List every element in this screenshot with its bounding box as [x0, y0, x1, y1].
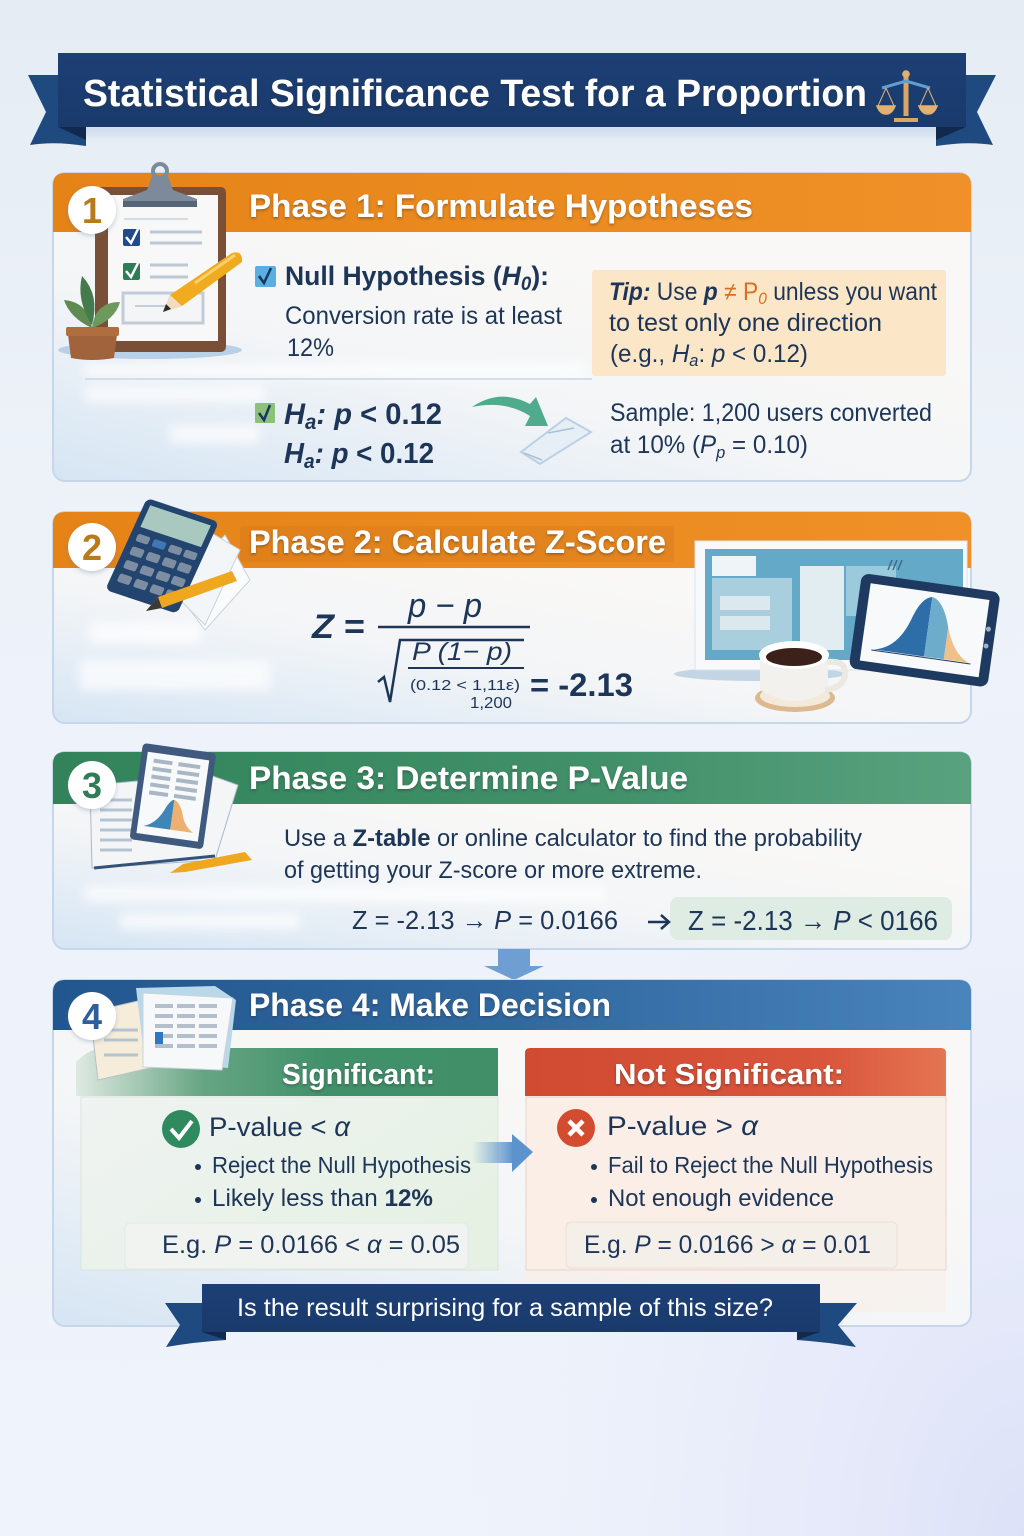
- icon: balance scales: [877, 71, 937, 120]
- example box: [566, 1222, 897, 1268]
- z to p results: [352, 897, 952, 940]
- instruction text: Use a Z-table or online calculator to find the probability: [284, 825, 862, 852]
- alternative hypotheses: a: [304, 451, 315, 473]
- example box: [125, 1223, 468, 1269]
- heading: significant: Significant:: [282, 1059, 435, 1091]
- z-score formula: p − p: [407, 587, 482, 625]
- icon: monitor, tablet and coffee: [674, 541, 1001, 712]
- icon: check badge: [162, 1110, 200, 1148]
- icon: stacked documents: [90, 986, 236, 1080]
- example box: E.g. P = 0.0166 > α = 0.01: [584, 1231, 871, 1259]
- alternative hypotheses: [255, 398, 442, 473]
- null hypothesis block: 12%: [287, 334, 334, 362]
- heading: Phase 1: Formulate Hypotheses: [249, 188, 753, 224]
- z-score formula: = -2.13: [530, 667, 633, 703]
- null hypothesis block: Conversion rate is at least: [285, 302, 562, 330]
- z to p results: Z = -2.13 → P < 0166: [688, 905, 938, 936]
- tip callout: (e.g., H: [610, 340, 690, 368]
- icon: cross badge: [557, 1109, 595, 1147]
- icon: clipboard with plant and pencil: [58, 164, 242, 360]
- z-score formula: (0.12 < 1,11ε): [410, 677, 520, 694]
- heading: Phase 3: Determine P-Value: [249, 760, 688, 796]
- panel: significant: [76, 1048, 498, 1270]
- null hypothesis block: ):: [531, 261, 549, 291]
- z to p results: Z = -2.13 → P = 0.0166: [352, 905, 618, 935]
- icon: folded paper: [521, 418, 591, 464]
- example box: E.g. P = 0.0166 < α = 0.05: [162, 1231, 460, 1259]
- number badge 1: 1: [82, 190, 102, 231]
- heading: [240, 526, 674, 562]
- tip callout: a: [689, 351, 698, 370]
- bottom banner: [165, 1284, 857, 1347]
- number badge 3: 3: [82, 765, 102, 806]
- criterion: P-value < α: [209, 1112, 352, 1142]
- tip callout: [592, 270, 946, 376]
- number badge 4: 4: [82, 996, 102, 1037]
- z-score formula: [311, 587, 633, 712]
- z-score formula: Z =: [311, 608, 365, 646]
- sample text: at 10% (P: [610, 431, 717, 459]
- panel: phase 4: [53, 980, 971, 1326]
- tip callout: 0: [758, 289, 767, 308]
- tip callout: to test only one direction: [609, 309, 882, 337]
- bullets: Reject the Null Hypothesis: [212, 1152, 471, 1178]
- null hypothesis block: [255, 261, 562, 362]
- heading: not significant: Not Significant:: [614, 1059, 844, 1091]
- panel: phase 1: [53, 164, 971, 481]
- alternative hypotheses: < 0.12: [360, 398, 445, 431]
- sample text: = 0.10): [725, 431, 808, 459]
- sample text: p: [715, 443, 725, 462]
- criterion: P-value > α: [607, 1111, 760, 1141]
- icon: tablet and papers: [90, 743, 252, 873]
- bullets: [591, 1152, 933, 1212]
- z-score formula: P (1− p): [412, 638, 512, 666]
- arrow: phase 3 to phase 4: [484, 949, 544, 980]
- number badge 2: 2: [82, 527, 102, 568]
- panel: phase 2: [53, 498, 1001, 723]
- number badge 1: [68, 186, 116, 234]
- title text: Statistical Significance Test for a Proportion: [83, 73, 867, 115]
- tip callout: unless you want: [767, 278, 937, 306]
- heading: Phase 4: Make Decision: [249, 987, 611, 1023]
- number badge 2: [68, 523, 116, 571]
- panel: not significant: [525, 1048, 946, 1312]
- z-score formula: 1,200: [470, 695, 512, 712]
- alternative hypotheses: < 0.12: [357, 438, 438, 470]
- arrow: curved teal: [472, 397, 548, 426]
- instruction text: of getting your Z-score or more extreme.: [284, 857, 702, 884]
- alternative hypotheses: H: [284, 438, 305, 470]
- number badge 3: [68, 761, 116, 809]
- arrow: significant to not significant: [472, 1134, 533, 1172]
- instruction text: [284, 825, 862, 884]
- null hypothesis block: 0: [521, 274, 532, 295]
- wisps: [85, 364, 585, 443]
- icon: calculator with pencil and papers: [105, 498, 250, 630]
- tip callout: p < 0.12): [712, 340, 811, 368]
- alternative hypotheses: H: [284, 398, 306, 431]
- bullets: [195, 1152, 471, 1212]
- alternative hypotheses: a: [305, 411, 317, 434]
- sample text: Sample: 1,200 users converted: [610, 399, 932, 427]
- bullets: Fail to Reject the Null Hypothesis: [608, 1152, 933, 1178]
- null hypothesis block: Null Hypothesis (H: [285, 261, 521, 291]
- panel: phase 3: [53, 743, 971, 949]
- sample text: [610, 399, 932, 462]
- banner text: Is the result surprising for a sample of this size?: [237, 1294, 773, 1322]
- tip callout: Tip: Use p ≠ P: [609, 278, 761, 306]
- alternative hypotheses: : p: [315, 438, 348, 470]
- alternative hypotheses: : p: [316, 398, 352, 431]
- bullets: Likely less than 12%: [212, 1185, 433, 1212]
- tip callout: :: [698, 340, 712, 368]
- title banner: [28, 53, 996, 146]
- bullets: Not enough evidence: [608, 1185, 834, 1212]
- panel: phase 2: Phase 2: Calculate Z-Score: [249, 524, 666, 560]
- plant: [64, 300, 92, 328]
- number badge 4: [68, 992, 116, 1040]
